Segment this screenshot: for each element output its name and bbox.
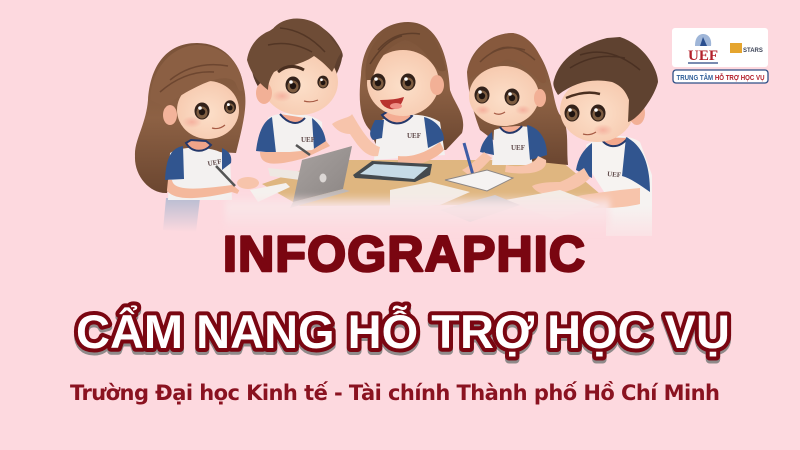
student 4: girl with pen (445, 33, 568, 191)
bottom mist of illustration (225, 194, 610, 234)
student 4: girl with pen: UEF (511, 144, 525, 152)
subtitle: Trường Đại học Kinh tế - Tài chính Thành phố Hồ Chí Minh (70, 381, 720, 405)
badge: centre name: TRUNG TÂM HỖ TRỢ HỌC VỤ (676, 73, 764, 82)
student 2: boy with laptop (247, 19, 352, 208)
student 2: boy with laptop: UEF (301, 136, 315, 144)
illustration: five students around a table (135, 19, 658, 236)
student 5: boy reading (532, 37, 658, 236)
notebook (445, 170, 513, 191)
heading: CẨM NANG HỖ TRỢ HỌC VỤ: CẨM NANG HỖ TRỢ HỌC VỤ (76, 305, 730, 358)
student 1: girl writing: UEF (207, 158, 222, 168)
student 1: girl writing (135, 43, 290, 232)
student 5: boy reading: UEF (607, 170, 621, 179)
laptop (290, 146, 352, 208)
student 3: girl talking (332, 22, 463, 182)
tablet (353, 161, 432, 182)
table (262, 160, 612, 206)
student 3: girl talking: UEF (407, 132, 421, 140)
heading: INFOGRAPHIC: INFOGRAPHIC (223, 226, 585, 282)
logo card: UEF and QS Stars: UEF (688, 48, 718, 64)
heading: CẨM NANG HỖ TRỢ HỌC VỤ: CẨM NANG HỖ TRỢ HỌC VỤ (76, 308, 730, 361)
logo card: UEF and QS Stars (672, 28, 768, 67)
logo card: UEF and QS Stars: STARS (743, 48, 763, 54)
logo block (672, 28, 768, 83)
open books on the table (390, 182, 600, 222)
